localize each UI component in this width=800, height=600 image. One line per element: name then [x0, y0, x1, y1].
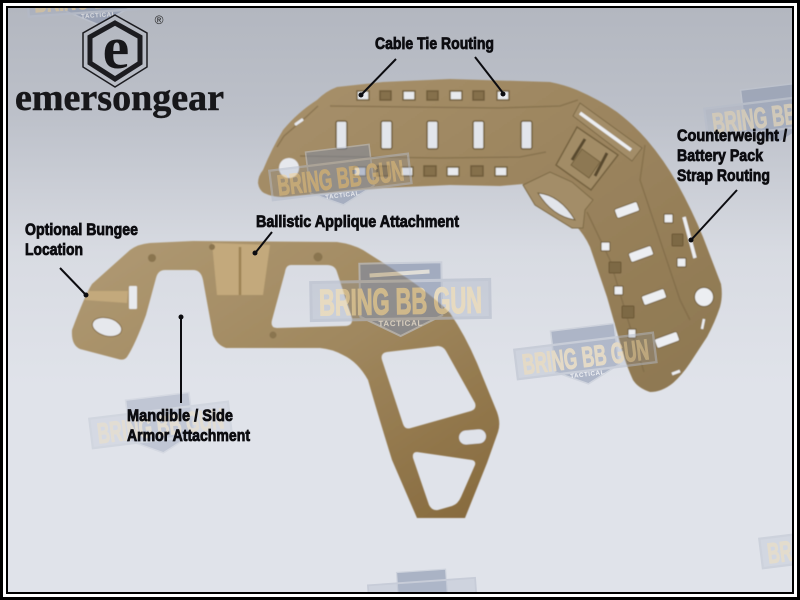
watermark: lower left: BRING BB GUN — [96, 403, 226, 450]
label: mandible side armor: Armor Attachment — [127, 426, 250, 445]
watermark: lower right: TACTICAL — [570, 369, 605, 380]
oval side plate — [523, 172, 593, 228]
watermark: centre: TACTICAL — [378, 319, 423, 328]
label: ballistic applique: Ballistic Applique Attachment — [256, 212, 459, 231]
label: cable tie routing: Cable Tie Routing — [375, 34, 494, 53]
watermark: on rail: BRING BB GUN — [276, 155, 406, 202]
bungee strip and slot — [85, 286, 137, 309]
watermark: top: TACTICAL — [81, 11, 116, 20]
watermark: centre: BRING BB GUN — [319, 280, 482, 323]
arrow: mandible — [178, 314, 184, 403]
label: optional bungee: Location — [25, 240, 83, 259]
helmet rail: upper part — [258, 79, 722, 392]
watermark: bottom — [367, 567, 477, 600]
watermark: lower left — [88, 388, 233, 461]
watermark: top — [26, 0, 169, 30]
rail ridge lines — [277, 100, 690, 372]
arrow: optional bungee — [60, 268, 88, 298]
label: mandible side armor: Mandible / Side — [127, 406, 233, 425]
watermark: centre — [310, 261, 491, 338]
label: optional bungee: Optional Bungee — [25, 220, 138, 239]
mandible plate: lower part — [72, 241, 499, 518]
watermark: on rail — [268, 140, 413, 213]
angled slots — [614, 201, 680, 349]
watermark: on rail: TACTICAL — [325, 190, 360, 201]
registered mark: ® — [155, 13, 164, 27]
rail body — [258, 79, 722, 392]
oval holes — [90, 314, 487, 445]
arrow: counterweight — [688, 190, 737, 242]
applique panel — [212, 243, 270, 295]
plate body with windows — [72, 241, 499, 518]
arrow: cable tie left — [358, 59, 396, 98]
long strap slit — [573, 103, 642, 161]
watermark: lower right — [513, 319, 658, 392]
lower row of routing holes — [354, 166, 507, 176]
end hole and slit — [279, 118, 304, 178]
arrow: cable tie right — [475, 57, 506, 96]
logo letter: e — [103, 15, 129, 81]
side square holes — [601, 214, 686, 338]
label: counterweight strap routing: Strap Routing — [677, 166, 770, 185]
label: optional bungee — [25, 220, 138, 259]
arrow: ballistic applique — [252, 232, 272, 256]
logo: emersongear — [15, 13, 224, 119]
buckle — [556, 127, 618, 190]
thin side slit — [684, 217, 695, 258]
upper row of routing holes — [357, 91, 509, 100]
wordmark: emersongear — [15, 77, 224, 119]
label: mandible side armor — [127, 406, 250, 445]
small bumps — [148, 244, 322, 338]
round hole and small slits — [672, 288, 714, 374]
label: counterweight strap routing: Battery Pack — [677, 146, 763, 165]
watermark: lower right: BRING BB GUN — [521, 334, 651, 381]
centre slots — [336, 121, 532, 149]
label: counterweight strap routing — [677, 126, 787, 185]
logo hexagon — [83, 15, 147, 87]
